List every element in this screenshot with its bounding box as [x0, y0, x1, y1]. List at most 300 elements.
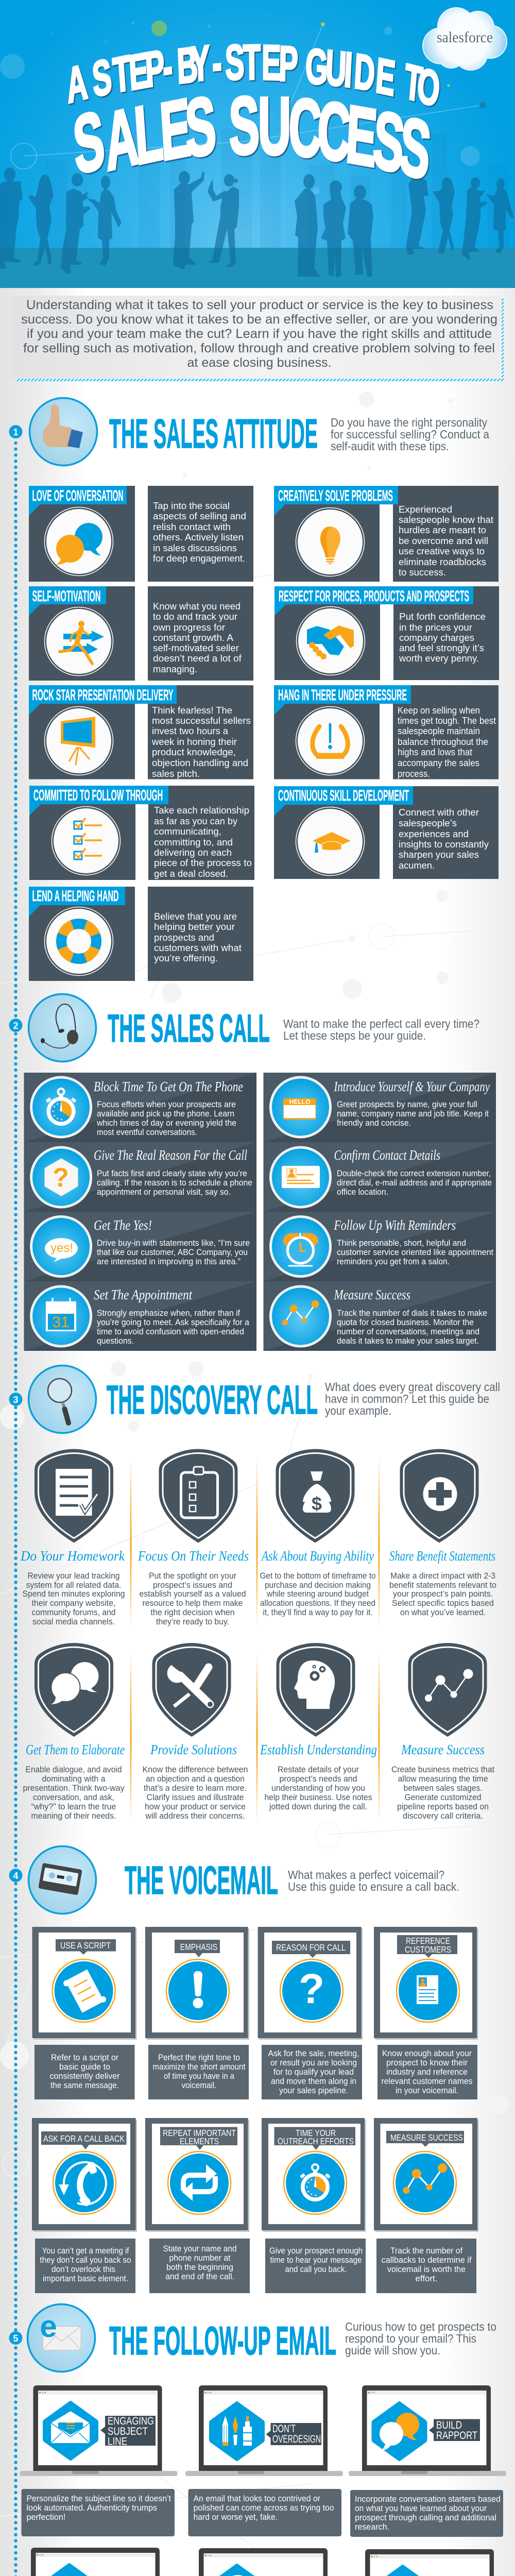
panel: lend a helping hand — [29, 887, 253, 981]
panel: committed to follow through: as far as you can by — [154, 816, 238, 826]
panel: creatively solve problems: use creative ways to — [399, 546, 485, 556]
card: ask for a call back — [32, 2118, 137, 2293]
icon: money bag shield: $ — [312, 1493, 322, 1514]
step: set the appointment: Set The Appointment — [94, 1287, 193, 1302]
step: follow up with reminders: customer service oriented like appointment — [337, 1248, 493, 1257]
icon: line chart — [271, 1286, 331, 1346]
card: establish understanding: Restate details of your — [278, 1765, 359, 1774]
panel: respect for prices: Put forth confidence — [399, 611, 486, 622]
card: measure success: between sales stages. — [404, 1784, 482, 1793]
intro copy: Do you have the right personality — [331, 416, 487, 429]
section 3: the discovery call — [9, 1365, 500, 1822]
label — [266, 2423, 321, 2445]
panel: rock star presentation delivery: sales pitch. — [152, 768, 200, 779]
step number 1: 1 — [13, 427, 19, 437]
panel: lend a helping hand: helping better your — [154, 921, 235, 932]
panel: love of conversation: in sales discussions — [153, 543, 237, 553]
panel: creatively solve problems: be overcome and will — [399, 535, 488, 546]
panel: creatively solve problems: to success. — [399, 567, 446, 578]
card: share benefit statements: Make a direct impact with 2-3 — [390, 1571, 495, 1581]
panel: creatively solve problems: CREATIVELY SOLVE PROBLEMS — [278, 487, 393, 504]
frame — [32, 2118, 137, 2232]
panel: love of conversation: LOVE OF CONVERSATION — [32, 487, 124, 504]
description: phone number at — [169, 2253, 231, 2263]
intro text block: success. Do you know what it takes to be an effective seller, or are you wondering — [21, 312, 497, 327]
card: measure success: Generate customized — [405, 1793, 481, 1802]
icon: checklist — [74, 818, 102, 859]
description: Track the number of — [390, 2246, 462, 2256]
card: do your homework: social media channels. — [32, 1617, 115, 1626]
description: on what you have learned about your — [355, 2504, 487, 2513]
step: set the appointment: Strongly emphasize when, rather than if — [97, 1309, 240, 1318]
panel: continuous skill development: sharpen your sales — [399, 849, 479, 860]
panel: rock star presentation delivery: Think fearless! The — [152, 705, 232, 716]
description: the same message. — [50, 2081, 119, 2090]
description — [22, 2489, 175, 2536]
description: polished can come across as trying too — [194, 2503, 334, 2513]
panel: hang in there under pressure: salespeople maintain — [398, 725, 480, 736]
label: OVERDESIGN — [272, 2433, 321, 2445]
panel: lend a helping hand: Believe that you are — [154, 911, 237, 922]
card: share benefit statements: benefit statements relevant to — [389, 1581, 496, 1590]
icon: email badge — [28, 2304, 95, 2372]
panel: self-motivation: own progress for — [153, 622, 225, 633]
description: Refer to a script or — [51, 2053, 118, 2062]
panel: committed to follow through: get a deal closed. — [154, 868, 228, 879]
intro text block: if you and your team make the cut? Learn if you have the right skills and attitude — [27, 327, 492, 341]
laptop — [349, 2385, 506, 2476]
icon: calendar: 31 — [52, 1314, 70, 1331]
title line 1: A STEP-BY-STEP GUIDE TO — [64, 34, 442, 117]
icon: pressure warning — [313, 723, 348, 759]
card: measure success: Create business metrics that — [391, 1765, 494, 1774]
intro copy — [288, 1868, 459, 1893]
card: focus on their needs: the right decision when — [150, 1608, 235, 1617]
icon: hello name tag — [271, 1077, 331, 1137]
card: provide solutions: Know the difference between — [142, 1765, 248, 1774]
description — [377, 2045, 477, 2099]
intro copy: respond to your email? This — [345, 2332, 476, 2345]
step: measure success: quota for closed business. Monitor the — [337, 1318, 474, 1327]
frame — [145, 2118, 249, 2232]
card: case studies — [18, 2548, 175, 2576]
laptop — [352, 2549, 509, 2576]
card: establish understanding: help their business. Use notes — [265, 1793, 372, 1802]
panel: respect for prices: worth every penny. — [399, 653, 479, 664]
section 2: the sales call: THE SALES CALL — [108, 1007, 270, 1050]
laptop — [185, 2548, 343, 2576]
panel: continuous skill development: Connect with other — [399, 807, 479, 818]
step: confirm contact details: Double-check the correct extension number, — [337, 1169, 491, 1178]
intro text block: for selling such as motivation, follow through and creative problem solving to feel — [23, 341, 495, 355]
label: ENGAGING — [108, 2415, 154, 2427]
dotted timeline — [14, 443, 18, 2576]
description: basic guide to — [59, 2062, 110, 2072]
step: introduce yourself: name, company name and job title. Keep it — [337, 1109, 489, 1118]
card: get them to elaborate: meaning of their needs. — [31, 1811, 116, 1821]
step: confirm contact details: Confirm Contact Details — [334, 1147, 440, 1163]
card: do your homework: their company website, — [32, 1599, 115, 1608]
icon: pencils hexagon — [211, 2403, 263, 2460]
description: You can’t get a meeting if — [42, 2246, 129, 2256]
panel: lend a helping hand: prospects and — [154, 932, 214, 943]
step number 5: 5 — [13, 2333, 19, 2344]
laptop — [185, 2385, 343, 2476]
icon: cassette badge — [29, 1846, 96, 1913]
section 5: the follow-up email — [9, 2304, 509, 2576]
panel: left call steps — [24, 1073, 256, 1351]
icon: money bag shield — [276, 1449, 354, 1543]
card: share benefit statements: Select specific topics based — [392, 1599, 494, 1608]
step: real reason: Put facts first and clearly state why you’re — [97, 1169, 247, 1178]
card: share benefit statements — [389, 1449, 496, 1617]
intro copy: self-audit with these tips. — [331, 439, 449, 453]
card: provide solutions: will address their concerns. — [145, 1811, 245, 1821]
intro copy — [283, 1017, 479, 1042]
frame — [145, 1927, 249, 2040]
card: measure success: pipeline reports based on — [397, 1802, 489, 1811]
panel: self-motivation: doesn’t need a lot of — [153, 653, 242, 664]
step: get the yes: that like our customer, ABC Company, you — [97, 1248, 248, 1257]
icon: bubbles shield — [35, 1643, 113, 1737]
step: block time: Focus efforts when your prospects are — [97, 1100, 236, 1109]
label: TIME YOUR — [296, 2128, 336, 2138]
icon: question hexagon: ? — [53, 1163, 69, 1193]
label — [100, 2415, 156, 2447]
description: and move them along in — [271, 2077, 356, 2086]
card: do your homework — [20, 1449, 125, 1626]
description — [376, 2239, 476, 2293]
icon: plus shield — [400, 1449, 479, 1543]
panel: committed to follow through: piece of the process to — [154, 857, 252, 868]
panel: creatively solve problems: eliminate roadblocks — [399, 556, 486, 567]
step number 1 — [9, 425, 23, 438]
icon: question mark: ? — [299, 1965, 324, 2012]
step: introduce yourself: friendly and concise. — [337, 1118, 411, 1128]
panel: continuous skill development: salespeople’s — [399, 818, 457, 828]
card: get them to elaborate: dominating with a — [42, 1774, 106, 1784]
icon: headset badge — [29, 994, 96, 1061]
card: use a script — [32, 1927, 137, 2099]
panel: creatively solve problems: Experienced — [399, 504, 452, 515]
step: set the appointment: time to avoid confusion with open-ended — [97, 1327, 244, 1336]
intro text block: Understanding what it takes to sell your product or service is the key to business — [26, 298, 493, 312]
card: establish understanding: understanding of how you — [271, 1784, 365, 1793]
description: Know enough about your — [382, 2049, 472, 2058]
card: provide solutions: an objection and a question — [146, 1774, 245, 1784]
section 4: the voicemail: THE VOICEMAIL — [125, 1858, 278, 1903]
card: don't overdesign — [185, 2385, 343, 2536]
intro copy — [345, 2320, 496, 2357]
label — [160, 2127, 237, 2150]
card: ask about buying ability — [260, 1449, 376, 1617]
card: provide solutions: Clarify issues and illustrate — [146, 1793, 244, 1802]
icon: stopwatch — [284, 2151, 347, 2214]
frame — [258, 1927, 363, 2040]
description: callbacks to determine if — [381, 2256, 472, 2265]
label: DON’T — [272, 2423, 296, 2435]
icon: graduation cap — [313, 832, 351, 853]
icon: lifebuoy — [61, 924, 96, 959]
description: Ask for the sale, meeting, — [268, 2049, 359, 2058]
description — [265, 2239, 366, 2293]
intro copy: Curious how to get prospects to — [345, 2320, 496, 2333]
description: Perfect the right tone to — [158, 2053, 240, 2062]
label: MEASURE SUCCESS — [390, 2132, 463, 2143]
panel: continuous skill development: experiences and — [399, 828, 469, 839]
description: of time you have in a — [164, 2072, 235, 2081]
step: block time: available and pick up the phone. Learn — [97, 1109, 234, 1118]
label: ELEMENTS — [180, 2136, 219, 2146]
label — [386, 2131, 464, 2147]
intro copy: What does every great discovery call — [325, 1380, 500, 1394]
panel: love of conversation: Tap into the social — [153, 500, 230, 511]
step number 4 — [9, 1869, 23, 1882]
step: set the appointment: questions. — [97, 1336, 134, 1346]
panel: respect for prices: company charges — [399, 632, 474, 643]
panel: hang in there under pressure: times get tough. The best — [398, 715, 496, 726]
frame — [374, 2118, 479, 2232]
step: real reason — [31, 1147, 252, 1207]
description: prospect to know their — [386, 2058, 468, 2067]
description: time to hear your message — [270, 2256, 362, 2265]
card: recap questions — [185, 2548, 343, 2576]
description: hard or worse yet, fake. — [194, 2513, 278, 2522]
card: get them to elaborate: “why?” to learn the true — [31, 1802, 116, 1811]
icon: handshake — [307, 625, 354, 659]
icon: stopwatch — [31, 1077, 91, 1137]
card: measure success — [374, 2118, 479, 2293]
intro copy: have in common? Let this guide be — [325, 1392, 489, 1405]
icon: question hexagon — [31, 1147, 91, 1207]
section 2: the sales call — [9, 994, 496, 1351]
step: introduce yourself — [271, 1077, 490, 1137]
panel: committed to follow through: committing to, and — [154, 837, 233, 848]
panel: right call steps — [264, 1073, 496, 1351]
card: get them to elaborate: Enable dialogue, and avoid — [26, 1765, 122, 1774]
description: both the beginning — [166, 2263, 233, 2272]
card: time your outreach efforts — [262, 2118, 366, 2293]
card: provide solutions — [142, 1643, 248, 1821]
step: real reason: appointment or personal visit, say so. — [97, 1188, 231, 1197]
card: focus on their needs: prospect’s issues and — [153, 1581, 232, 1590]
panel: respect for prices — [274, 586, 499, 680]
panel: hang in there under pressure: process. — [398, 768, 430, 779]
card: measure success — [391, 1643, 494, 1821]
panel: committed to follow through — [29, 786, 254, 880]
panel: love of conversation: for deep engagement. — [153, 553, 245, 564]
description — [148, 2045, 249, 2099]
icon: phone with return arrow — [53, 2151, 116, 2214]
card: focus on their needs — [138, 1449, 249, 1626]
label — [397, 1935, 457, 1958]
card: measure success: discovery call criteria. — [403, 1811, 483, 1821]
label: REFERENCE — [406, 1936, 450, 1946]
panel: committed to follow through: communicating, — [154, 826, 221, 837]
panel: hang in there under pressure: highs and lows that — [398, 747, 472, 757]
intro copy: Use this guide to ensure a call back. — [288, 1880, 459, 1893]
card: engaging subject line — [20, 2385, 177, 2536]
step: measure success — [271, 1286, 487, 1346]
card: establish understanding: prospect’s needs and — [279, 1774, 357, 1784]
card: build rapport — [349, 2385, 506, 2537]
label — [41, 2131, 127, 2149]
label: BUILD — [436, 2419, 462, 2431]
card: do your homework: Spend ten minutes exploring — [23, 1589, 125, 1599]
description: consistently deliver — [49, 2072, 120, 2081]
laptop — [18, 2548, 175, 2576]
icon: yes bubble — [31, 1217, 91, 1277]
intro copy: What makes a perfect voicemail? — [288, 1868, 444, 1882]
step number 2: 2 — [13, 1021, 19, 1031]
step: get the yes: are interested in improving in this area.” — [97, 1257, 241, 1266]
panel: self-motivation: to do and track your — [153, 611, 237, 622]
step: measure success: Measure Success — [334, 1287, 410, 1302]
card: do your homework: system for all related data. — [26, 1581, 122, 1590]
icon: bubbles hexagon — [373, 2403, 425, 2460]
card: provide solutions: Provide Solutions — [150, 1742, 237, 1757]
icon: tools shield — [152, 1643, 231, 1737]
icon: scroll — [53, 1959, 115, 2022]
step number 3 — [9, 1393, 23, 1406]
label: EMPHASIS — [180, 1942, 217, 1952]
card: measure success: allow measuring the time — [398, 1774, 488, 1784]
frame — [374, 1927, 478, 2040]
description: relevant customer names — [381, 2077, 473, 2086]
panel: continuous skill development: insights to constantly — [399, 839, 489, 850]
description: prospect through calling and additional — [355, 2513, 496, 2522]
panel: hang in there under pressure: accompany the sales — [398, 757, 479, 768]
card: ask about buying ability: it, they’ll find a way to pay for it. — [263, 1608, 373, 1617]
step: follow up with reminders: Follow Up With Reminders — [334, 1217, 456, 1233]
description: State your name and — [163, 2244, 237, 2253]
icon: calendar — [31, 1286, 91, 1346]
intro copy: guide will show you. — [345, 2344, 440, 2357]
icon: clipboard shield — [159, 1449, 238, 1543]
label: REPEAT IMPORTANT — [163, 2128, 236, 2138]
frame — [32, 1927, 137, 2040]
panel: self-motivation: self-motivated seller — [153, 642, 239, 653]
label: SUBJECT — [108, 2426, 148, 2437]
panel: rock star presentation delivery: most successful sellers — [152, 715, 251, 726]
logo: salesforce cloud — [422, 7, 507, 71]
panel: hang in there under pressure — [274, 685, 499, 779]
description: An email that looks too contrived or — [194, 2494, 320, 2503]
icon: checklist document shield — [35, 1449, 113, 1543]
label: USE A SCRIPT — [60, 1940, 111, 1951]
card: provide solutions: how your product or service — [145, 1802, 246, 1811]
card: get them to elaborate: presentation. Think two-way — [23, 1784, 125, 1793]
card: ask about buying ability: while steering around budget — [266, 1589, 369, 1599]
icon: envelope hexagon — [44, 2402, 97, 2459]
description: or result you are looking — [270, 2058, 357, 2067]
panel: creatively solve problems: hurdles are meant to — [399, 524, 486, 535]
icon: magnifier badge — [29, 1365, 96, 1433]
section 4: the voicemail — [9, 1846, 479, 2293]
section 1: the sales attitude — [9, 398, 499, 981]
icon: head with gears shield — [276, 1643, 355, 1737]
step: measure success: Track the number of dials it takes to make — [337, 1309, 487, 1318]
card: focus on their needs: they’re ready to buy. — [156, 1617, 229, 1626]
icon: question mark — [280, 1959, 343, 2022]
hero banner — [0, 0, 515, 288]
intro copy: for successful selling? Conduct a — [331, 428, 489, 441]
step: follow up with reminders: Think personable, short, helpful and — [337, 1239, 466, 1248]
step: set the appointment: you’re going to meet. Ask specifically for a — [97, 1318, 250, 1327]
card: do your homework: community forums, and — [32, 1608, 115, 1617]
card: share benefit statements: your prospect’s pain points. — [393, 1589, 493, 1599]
description — [149, 2239, 250, 2293]
icon: light bulb — [320, 527, 340, 565]
card: focus on their needs: establish yourself as a valued — [139, 1589, 246, 1599]
step: block time: which times of day or evening yield the — [96, 1118, 236, 1128]
card: establish understanding: jotted down during the call. — [269, 1802, 367, 1811]
panel: respect for prices: in the prices your — [399, 622, 472, 633]
step: introduce yourself: Greet prospects by name, give your full — [337, 1100, 477, 1109]
card: get them to elaborate: Get Them to Elaborate — [26, 1742, 125, 1757]
panel: self-motivation: SELF-MOTIVATION — [32, 588, 101, 605]
panel: love of conversation: relish contact with — [153, 521, 231, 532]
description: effort. — [415, 2274, 438, 2283]
panel: hang in there under pressure: Keep on selling when — [398, 705, 480, 716]
label: CUSTOMERS — [405, 1944, 451, 1955]
title — [64, 34, 442, 198]
label: OUTREACH EFFORTS — [278, 2136, 354, 2146]
description: for to qualify your lead — [273, 2067, 354, 2077]
step: block time: most eventful conversations. — [97, 1128, 197, 1137]
panel: continuous skill development: acumen. — [399, 860, 435, 871]
panel: hang in there under pressure: balance throughout the — [398, 736, 488, 747]
icon: id card — [271, 1147, 331, 1207]
icon: paperclip hexagon — [376, 2566, 429, 2576]
intro copy: Want to make the perfect call every time? — [283, 1017, 479, 1030]
step: real reason: Give The Real Reason For the Call — [94, 1147, 247, 1163]
label — [274, 2127, 355, 2150]
description: Personalize the subject line so it doesn’t — [27, 2494, 171, 2503]
step: get the yes: Drive buy-in with statements like, “I’m sure — [97, 1239, 250, 1248]
card: reason for call — [258, 1927, 363, 2099]
panel: continuous skill development — [274, 786, 499, 879]
intro text block: at ease closing business. — [187, 355, 332, 370]
icon: repeat arrows — [168, 2151, 231, 2214]
description: voicemail is worth the — [387, 2265, 466, 2274]
intro copy: your example. — [325, 1404, 391, 1417]
step: follow up with reminders — [271, 1217, 493, 1277]
panel: rock star presentation delivery — [29, 685, 253, 779]
icon: email badge: e — [40, 2309, 57, 2344]
panel: love of conversation: others. Actively listen — [153, 532, 244, 543]
card: focus on their needs: Focus On Their Needs — [138, 1548, 249, 1564]
panel: rock star presentation delivery: product knowledge, — [152, 747, 236, 757]
description — [35, 2045, 135, 2099]
panel: self-motivation — [29, 586, 253, 681]
card: focus on their needs: resource to help them make — [142, 1599, 243, 1608]
icon: profile document — [397, 1959, 459, 2022]
step: block time — [31, 1077, 243, 1137]
step number 4: 4 — [13, 1871, 19, 1881]
step: set the appointment — [31, 1286, 250, 1346]
icon: case study hexagon — [43, 2565, 96, 2576]
card: get them to elaborate: conversation, and ask, — [33, 1793, 114, 1802]
description — [262, 2045, 362, 2099]
panel: self-motivation: constant growth. A — [153, 632, 234, 643]
label: LINE — [108, 2436, 127, 2447]
label — [272, 1941, 350, 1958]
icon: speech bubbles — [56, 523, 102, 565]
panel: self-motivation: Know what you need — [153, 601, 241, 612]
step: follow up with reminders: reminders you get from a salon. — [337, 1257, 450, 1266]
step: get the yes — [31, 1217, 250, 1277]
